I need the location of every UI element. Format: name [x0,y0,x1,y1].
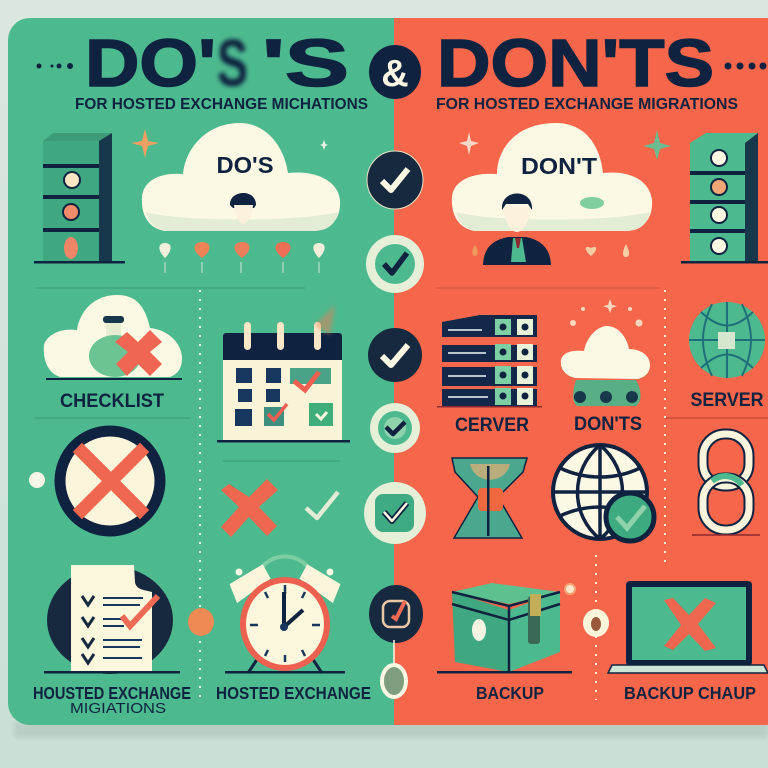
label: don'ts: DON'TS [574,414,642,435]
icon: small cloud with sparkles [561,299,650,406]
icon: center check 1 [367,151,423,209]
icon: green box [437,583,572,674]
icon: alarm clock [225,556,345,674]
icon: center ring [382,640,406,697]
cloud: do's [142,123,340,231]
icon: center check 5 [364,482,426,544]
icon: big x in circle [60,431,160,531]
icon: laptop with x [608,581,768,673]
icon: center check 2 [366,235,424,293]
icon: green sparkle [643,130,671,160]
icon: calendar [217,305,350,442]
title: do's: S [217,26,248,101]
title: do's [36,26,349,101]
label: backup: BACKUP [476,683,544,703]
icon: globe with check [553,445,654,541]
icon: cloud with x [44,295,182,380]
icon: cream ring blob [583,609,609,637]
label: housted exchange migrations: HOUSTED EXCHANGE [33,683,191,703]
subtitle: left: FOR HOSTED EXCHANGE MICHATIONS [75,96,368,113]
icon: green globe [689,302,765,378]
label: backup chaup: BACKUP CHAUP [624,683,756,703]
icon: small white dot [29,472,45,488]
cloud: do's: DO'S [216,152,274,178]
label: hosted exchange: HOSTED EXCHANGE [216,683,371,703]
icon: hourglass [452,458,527,538]
icon: person [483,194,551,265]
cloud: don't [452,123,652,231]
icon: right server rack [681,133,768,264]
title: do's: 'S [262,26,349,101]
icon: small pins right [472,244,629,257]
cloud: don't: DON'T [521,153,597,179]
icon: center check 6 [369,585,423,643]
icon: white sparkle [459,132,479,155]
divider lines [35,288,768,461]
label: cerver: CERVER [455,415,529,436]
badge: ampersand [369,45,421,99]
icon: checklist document [44,565,180,674]
icon: small sparkle [320,140,328,150]
label: checklist: CHECKLIST [60,391,164,412]
badge: ampersand: & [381,53,409,95]
icon: right server stack [437,315,542,408]
icon: orange sparkle [131,129,159,158]
label: housted exchange migrations [33,683,191,717]
icon: center check 4 [370,403,420,453]
icon: small orange ring [565,584,575,594]
icon: chain link [692,434,760,535]
title: don'ts: DON'TS [437,26,714,101]
icon: orange blob [188,608,214,636]
icon: row of pins [159,242,325,273]
icon: left server rack [34,133,125,264]
icon: center check 3 [368,328,422,382]
icon: white check [306,492,338,518]
subtitle: right: FOR HOSTED EXCHANGE MIGRATIONS [436,96,738,113]
icon: red x [221,479,278,537]
title: do's: DO' [85,26,216,101]
label: housted exchange migrations: MIGIATIONS [70,700,166,717]
label: server: SERVER [690,390,764,411]
